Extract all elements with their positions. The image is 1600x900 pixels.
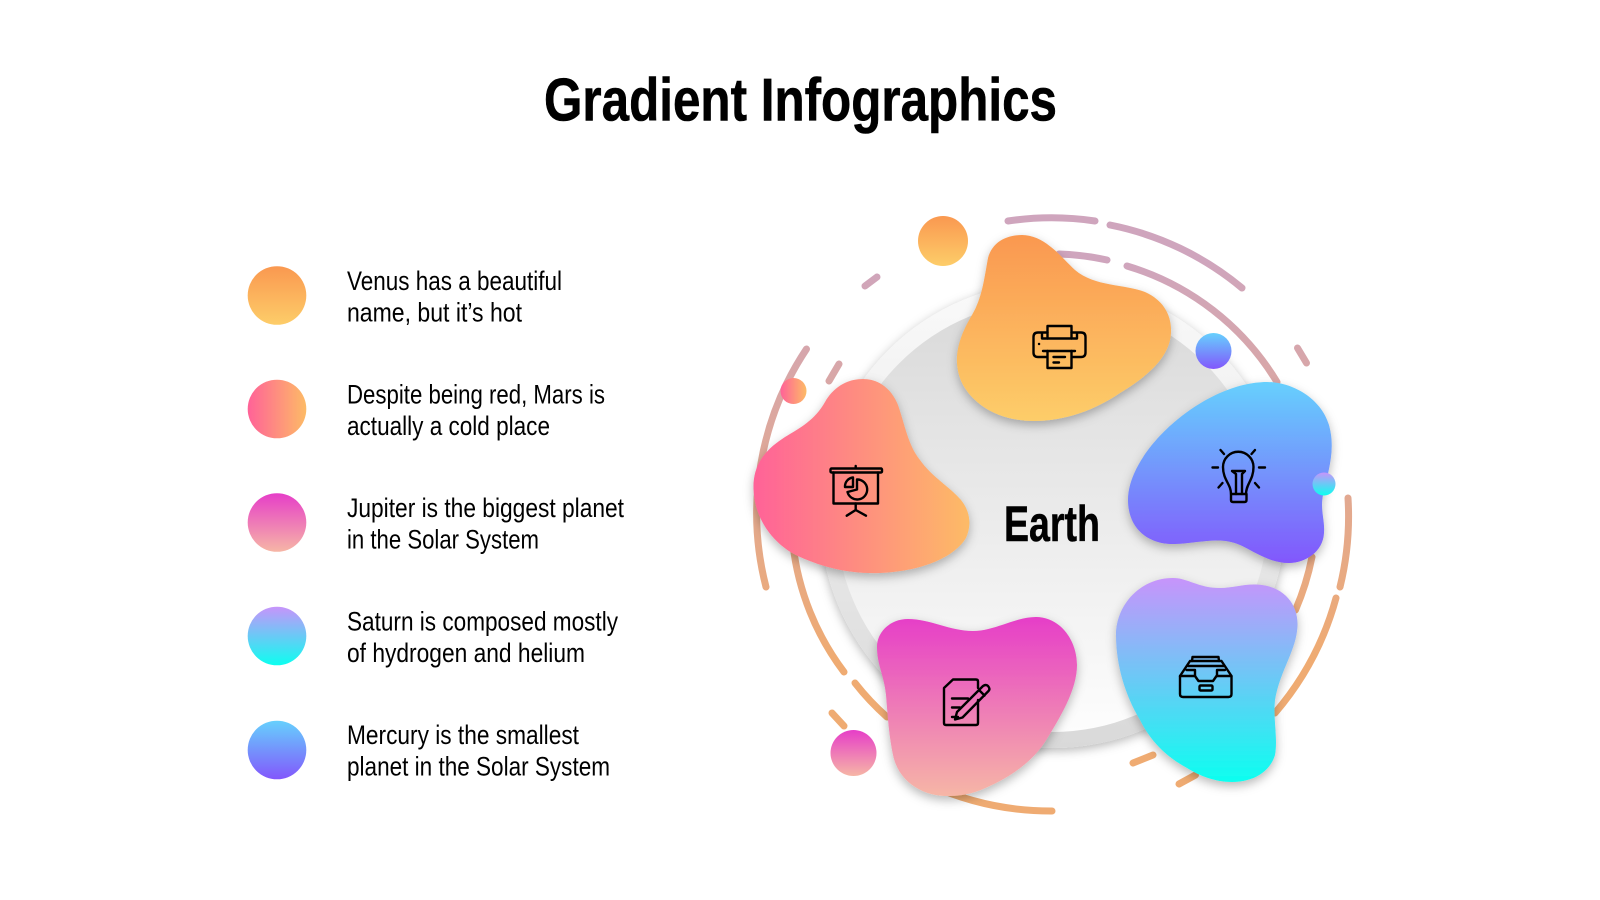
legend item: Venus: name, but it’s hot bbox=[347, 298, 522, 328]
legend item: Jupiter: Jupiter is the biggest planet bbox=[347, 493, 624, 523]
small dot: blue bbox=[1196, 333, 1232, 369]
blob: cyan tray bbox=[1116, 578, 1298, 782]
icon: light bulb bbox=[1212, 450, 1265, 502]
legend item: Jupiter bbox=[248, 493, 624, 554]
legend item: Venus: Venus has a beautiful bbox=[347, 266, 562, 296]
legend item: Mars bbox=[248, 380, 605, 441]
icon: presentation screen bbox=[830, 466, 882, 516]
center label: Earth bbox=[1004, 496, 1100, 552]
legend list bbox=[248, 266, 624, 782]
small dot: coral bbox=[780, 378, 806, 404]
legend item: Jupiter: in the Solar System bbox=[347, 524, 539, 554]
icon: printer bbox=[1034, 326, 1086, 368]
small dot: cyan bbox=[1312, 472, 1336, 496]
small dot: pink bbox=[830, 730, 876, 776]
legend item: Saturn: Saturn is composed mostly bbox=[347, 606, 618, 636]
legend item: Venus bbox=[248, 266, 562, 328]
blob: blue bulb bbox=[1128, 382, 1332, 563]
legend item: Mercury: planet in the Solar System bbox=[347, 752, 610, 782]
dashed orbit rings bbox=[757, 218, 1349, 811]
icon: inbox tray bbox=[1180, 657, 1232, 697]
legend item: Saturn bbox=[248, 606, 618, 668]
title: Gradient Infographics bbox=[544, 66, 1057, 134]
legend item: Mercury: Mercury is the smallest bbox=[347, 720, 579, 750]
central disk bbox=[820, 282, 1286, 748]
legend item: Mars: Despite being red, Mars is bbox=[347, 380, 605, 410]
legend item: Saturn: of hydrogen and helium bbox=[347, 638, 585, 668]
small dot: orange bbox=[918, 216, 968, 266]
blob: coral presentation bbox=[753, 379, 969, 573]
legend item: Mercury bbox=[248, 720, 610, 782]
blob: pink note bbox=[877, 617, 1077, 796]
legend item: Mars: actually a cold place bbox=[347, 411, 550, 441]
icon: note and pencil bbox=[944, 680, 989, 725]
blob: orange printer bbox=[957, 235, 1171, 421]
